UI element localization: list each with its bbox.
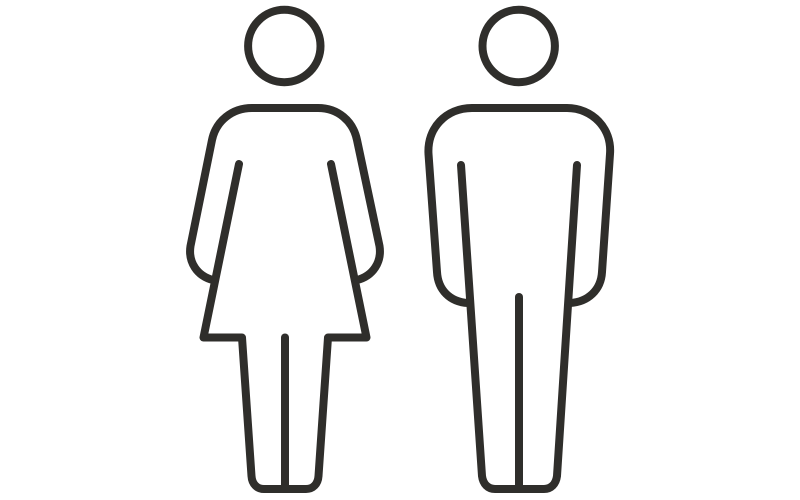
- man torso and arms: [428, 108, 610, 303]
- woman torso and arms: [190, 108, 380, 280]
- icon: man figure: [428, 10, 610, 489]
- icon: woman figure: [190, 10, 380, 489]
- man body and legs outline: [461, 165, 577, 489]
- man head: [482, 10, 555, 82]
- woman head: [248, 10, 320, 82]
- man leg divider: [515, 297, 523, 489]
- woman leg divider: [281, 338, 289, 489]
- woman dress and legs outline: [204, 164, 366, 489]
